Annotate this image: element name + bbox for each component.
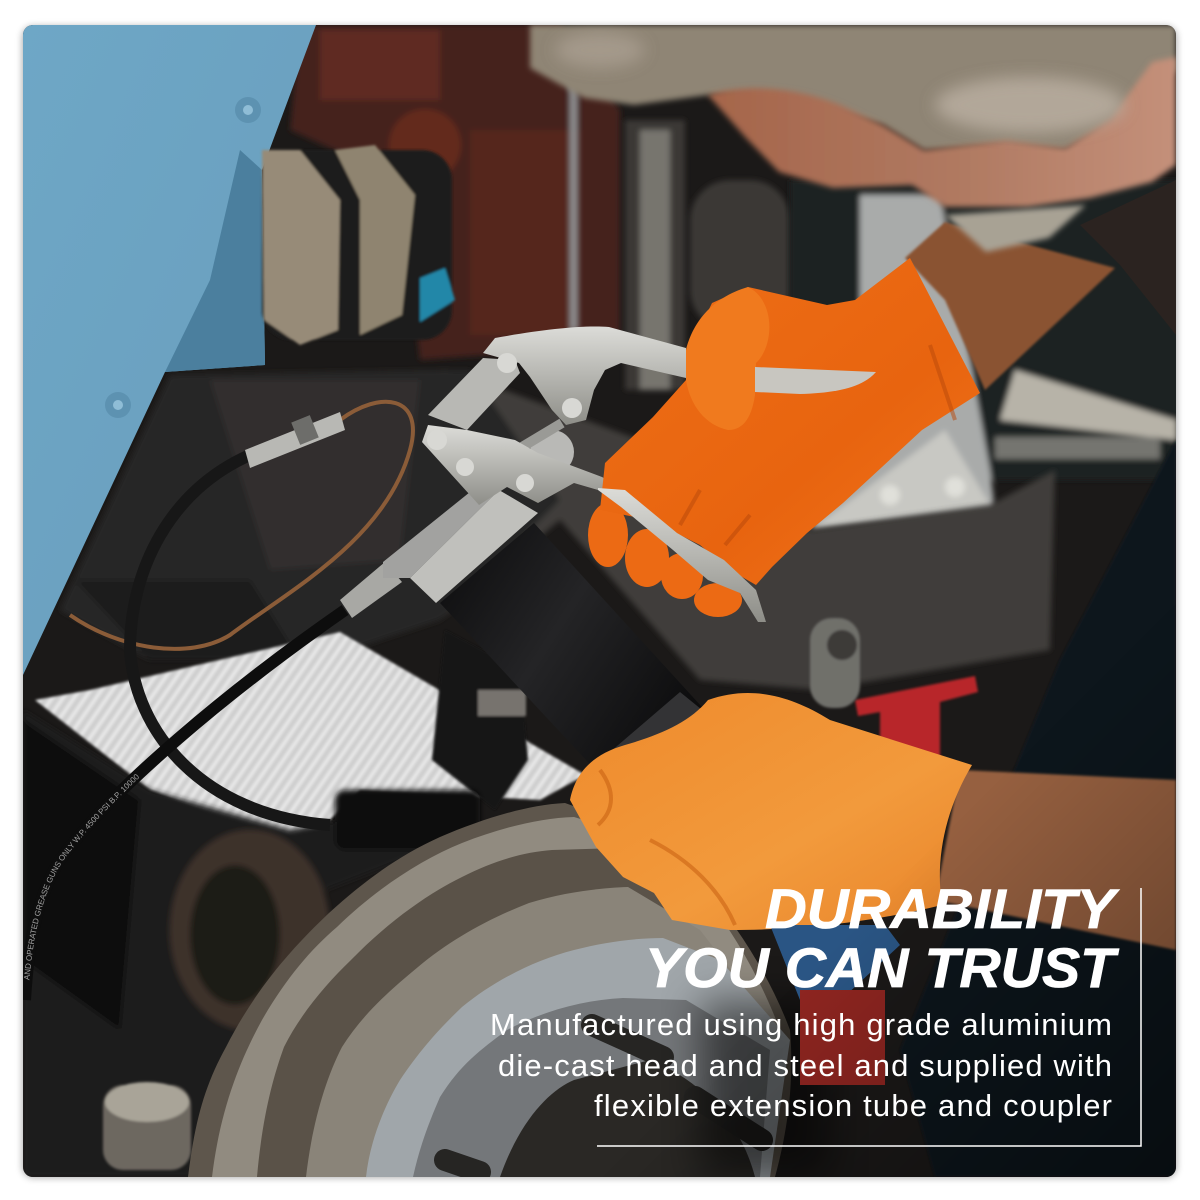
- floor with ribbed white mat: [35, 632, 585, 850]
- gun neck: [383, 493, 493, 578]
- upper glove thumb: [686, 287, 769, 430]
- flexible hose loop: [130, 455, 330, 825]
- gun collar: [410, 490, 538, 603]
- rivets: [497, 353, 517, 373]
- extension tube with printed text: AND OPERATED GREASE GUNS ONLY W.P. 4500 PSI B.P. 10000: [24, 774, 139, 980]
- lower orange glove: [570, 693, 972, 930]
- right background: metal bracket and dark machinery: [790, 180, 1180, 530]
- drum dark band: [257, 848, 664, 1177]
- heading: [645, 877, 1120, 999]
- lower lever: [422, 425, 604, 505]
- heading: YOU CAN TRUST: [645, 936, 1120, 999]
- bearing cap: [103, 1082, 191, 1170]
- coupler nozzle: [340, 562, 402, 618]
- blue label on red can: [770, 925, 900, 1085]
- lever tip over hand: [755, 367, 876, 394]
- link plate: [428, 358, 520, 430]
- dark axle and hub machinery: [23, 710, 480, 1177]
- hose fitting: [245, 412, 345, 468]
- frame lines: [597, 888, 1141, 1146]
- drum outer rim: [188, 803, 791, 1177]
- drum inner disc: [413, 998, 770, 1177]
- upper forearm: [905, 222, 1115, 390]
- rod and disc: [522, 423, 574, 474]
- red jack stand: [855, 676, 978, 760]
- drum light band: [212, 817, 780, 1177]
- head: hair: [530, 25, 1176, 150]
- lower forearm: [935, 770, 1176, 950]
- shock absorber: [430, 687, 530, 800]
- body text: Manufactured using high grade aluminium: [490, 1007, 1112, 1042]
- drum blue-grey disc: [366, 938, 790, 1177]
- hub: [500, 1060, 755, 1177]
- lower glove crease shadows: [598, 770, 735, 925]
- head: face skin: [708, 57, 1176, 207]
- body text: flexible extension tube and coupler: [594, 1088, 1112, 1123]
- copper brake line: [70, 402, 413, 649]
- wheel studs: [445, 1025, 762, 1172]
- extension tube with printed text: [23, 605, 348, 1000]
- upper orange glove: [600, 258, 980, 585]
- drum right side falloff: [700, 1000, 830, 1177]
- head: hair highlights: [555, 32, 1125, 133]
- barrel knurled end: [614, 692, 700, 748]
- top handle arm: [483, 327, 686, 425]
- black chassis beam: [60, 370, 1055, 690]
- body text: die-cast head and steel and supplied with: [498, 1048, 1112, 1083]
- drum second light band: [306, 887, 702, 1177]
- plaid shirt shoulder: [1080, 180, 1176, 335]
- grease gun: [340, 327, 712, 775]
- lever over fingers: [598, 488, 766, 622]
- upper glove shading: [680, 345, 955, 545]
- dark sleeve and torso: [900, 440, 1176, 1177]
- body text: [490, 1007, 1112, 1123]
- upper glove fingers: [588, 503, 742, 617]
- blue panel: [23, 25, 316, 675]
- alternator: [262, 145, 455, 345]
- heading: DURABILITY: [765, 877, 1120, 940]
- brake drum: [188, 803, 830, 1177]
- engine bay: red-brown housing: [290, 25, 790, 390]
- barrel: [440, 523, 702, 740]
- beard: [945, 205, 1086, 252]
- clevis pin bracket: [810, 618, 860, 708]
